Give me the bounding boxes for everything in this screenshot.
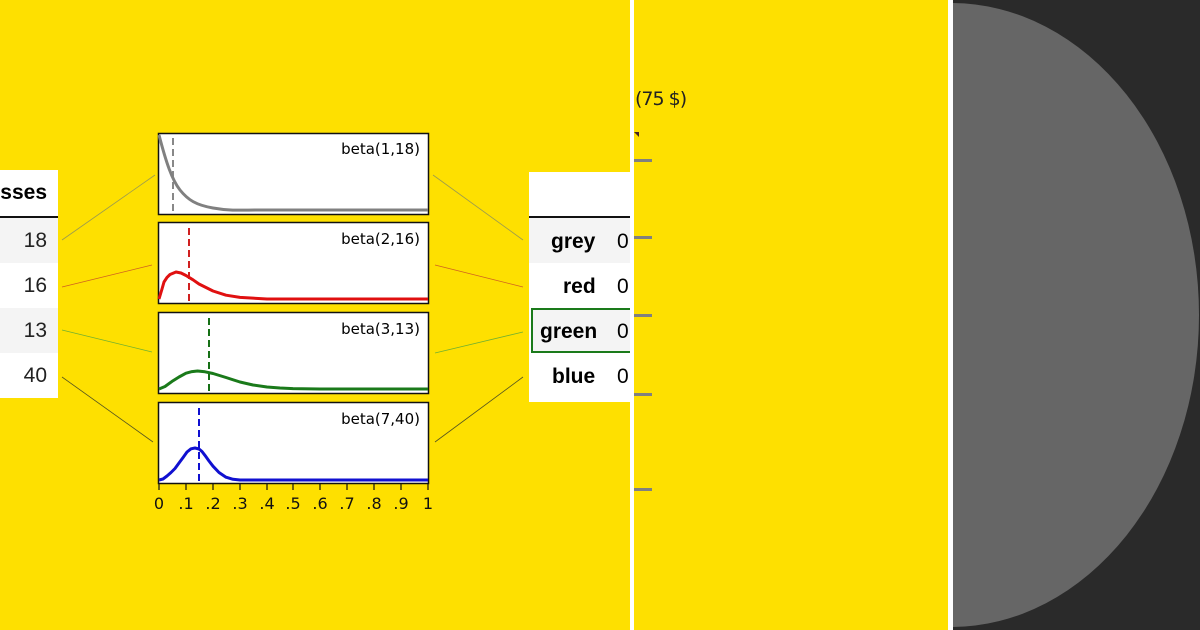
left table — [0, 170, 58, 398]
divider white line 2 — [948, 0, 953, 630]
left table rows — [0, 218, 58, 387]
panel: beta(7,40): beta(7,40) — [341, 410, 420, 428]
left table header — [0, 170, 58, 218]
panel: beta(1,18) — [158, 134, 428, 214]
x axis: .9 — [393, 494, 409, 513]
right table rows: 0 — [617, 275, 629, 298]
right table rows: 0 — [617, 365, 629, 388]
middle panel — [634, 88, 686, 491]
left table header: sses — [0, 181, 47, 204]
dark panel with grey circle — [953, 0, 1200, 630]
panel: beta(7,40) — [158, 402, 428, 484]
grey half circle — [703, 3, 1199, 627]
marker triangle — [634, 132, 639, 137]
right table rows: blue — [552, 365, 595, 388]
chart: beta distributions — [62, 132, 524, 513]
panel: beta(2,16) — [158, 222, 428, 304]
x axis: .4 — [259, 494, 275, 513]
divider white line 1 — [630, 0, 634, 630]
x axis — [154, 484, 433, 513]
left table rows: 40 — [24, 364, 47, 387]
x axis: .5 — [285, 494, 301, 513]
x axis: .8 — [366, 494, 382, 513]
tick marks — [634, 159, 652, 491]
x axis: 0 — [154, 494, 164, 513]
right table rows: grey — [551, 230, 595, 253]
panel: beta(2,16): beta(2,16) — [341, 230, 420, 248]
x axis: .7 — [339, 494, 355, 513]
right table — [529, 172, 630, 402]
connector lines — [62, 175, 523, 442]
x axis: .2 — [205, 494, 221, 513]
x axis: .1 — [178, 494, 194, 513]
panel: beta(1,18): beta(1,18) — [341, 140, 420, 158]
x axis: .6 — [312, 494, 328, 513]
right table rows — [529, 218, 630, 388]
left table rows: 13 — [24, 319, 47, 342]
price label: (75 $) — [635, 88, 686, 110]
right table rows: green — [540, 320, 597, 343]
panel: beta(3,13): beta(3,13) — [341, 320, 420, 338]
right table rows: 0 — [617, 320, 629, 343]
x axis: .3 — [232, 494, 248, 513]
left table rows: 18 — [24, 229, 47, 252]
x axis: 1 — [423, 494, 433, 513]
panel: beta(3,13) — [158, 312, 428, 394]
right table rows: red — [563, 275, 596, 298]
right table rows: 0 — [617, 230, 629, 253]
left table rows: 16 — [24, 274, 47, 297]
